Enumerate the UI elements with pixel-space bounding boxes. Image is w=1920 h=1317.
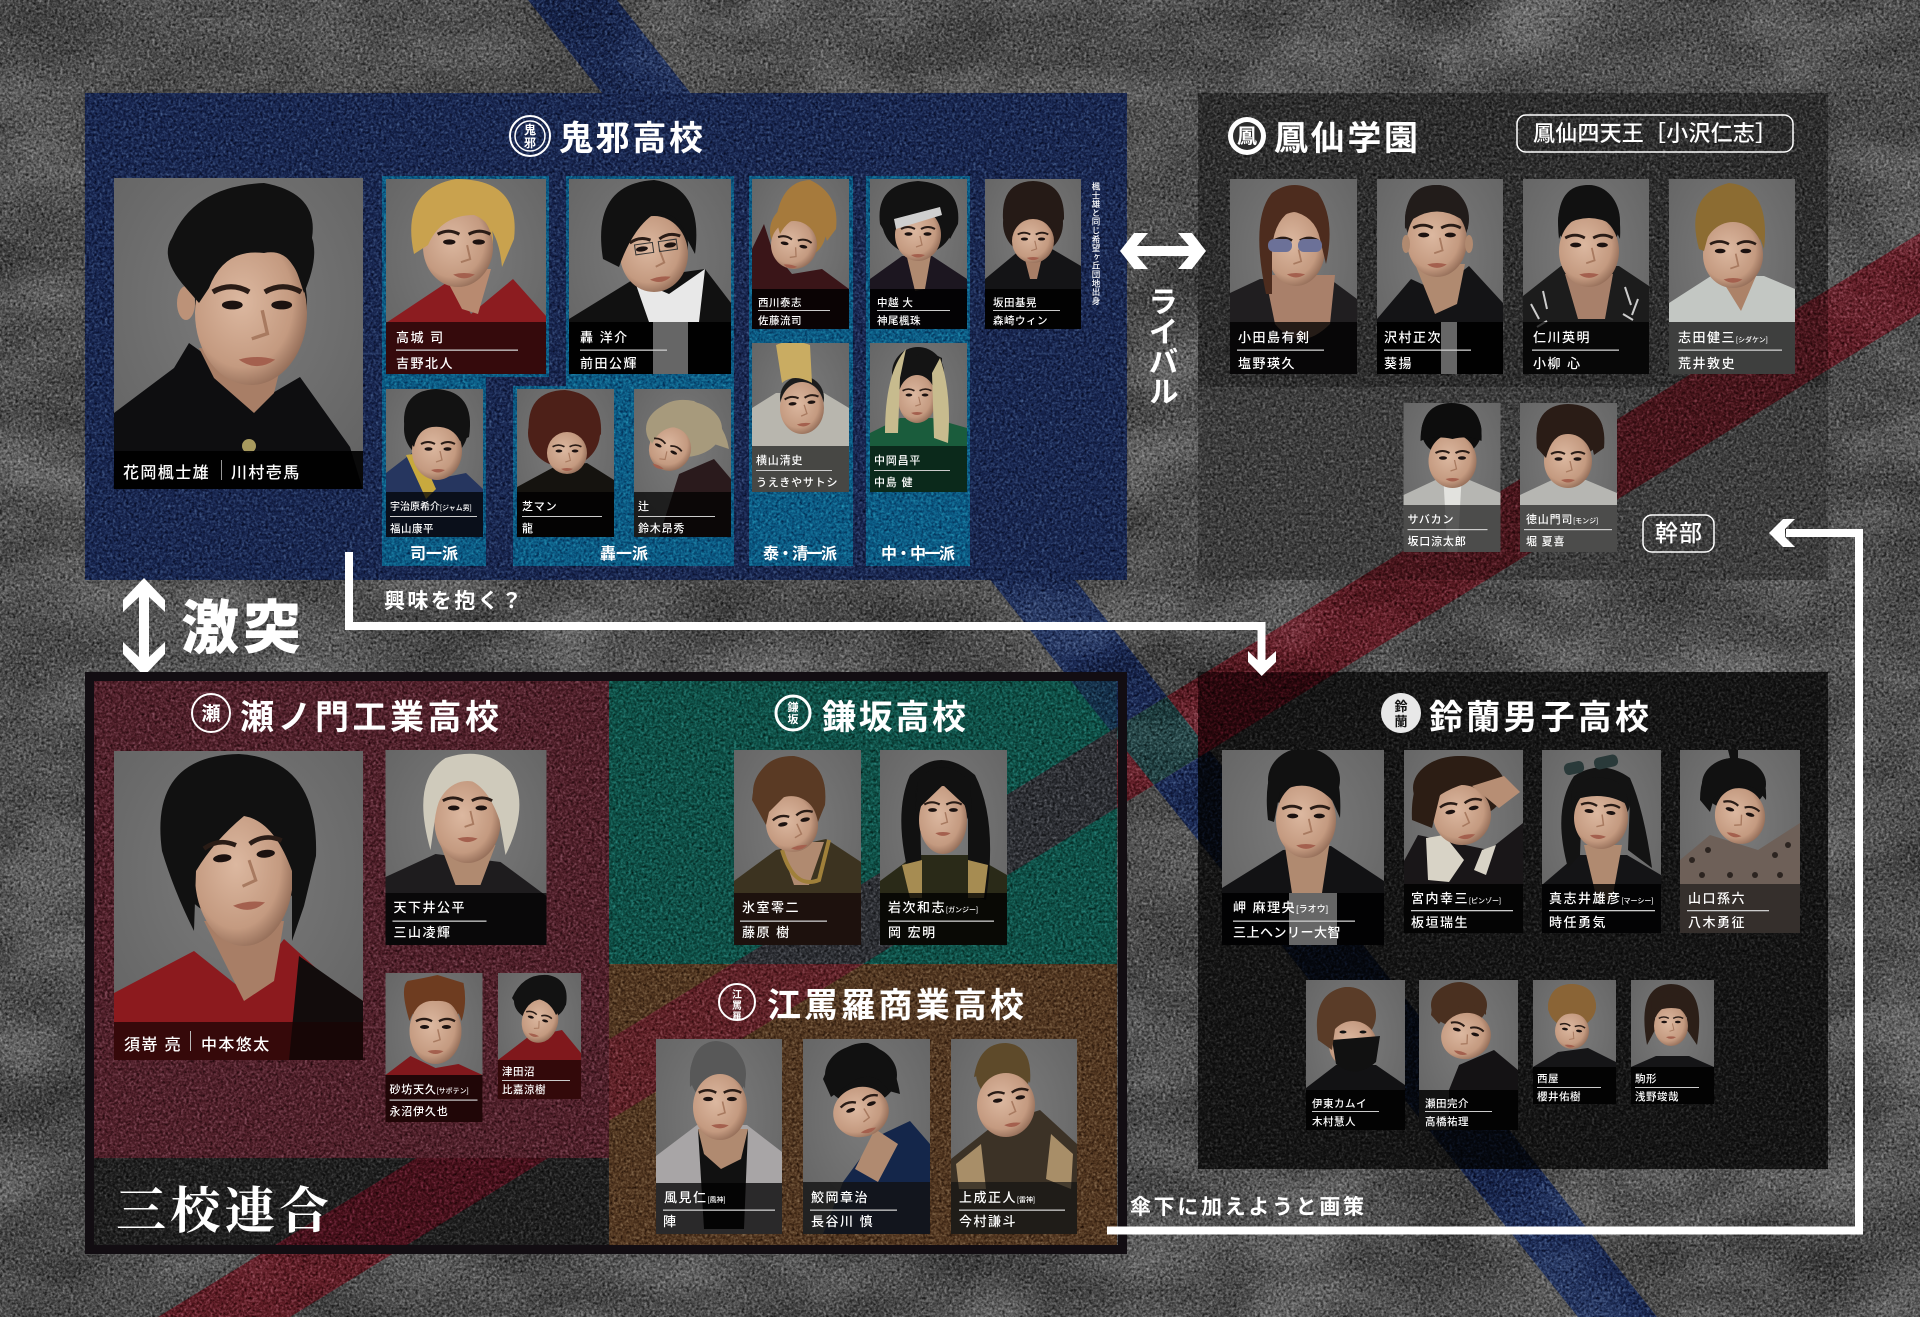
school title: 鬼邪高校: 鬼: [524, 122, 536, 137]
portrait: 風見仁: [656, 1039, 782, 1234]
portrait: 志田健三: 荒井敦史: [1678, 356, 1736, 371]
portrait: 伊東カムイ: 伊東カムイ: [1312, 1097, 1367, 1110]
portrait: 芝マン: 龍: [522, 521, 534, 535]
portrait: サバカン: サバカン: [1408, 513, 1454, 526]
school title: 鬼邪高校: 邪: [524, 136, 536, 150]
note: 希望ヶ丘団地出身: 楓士雄と同じ希望ヶ丘団地出身: [1091, 181, 1101, 305]
faction labels: 司一派: [410, 545, 458, 563]
portrait: 上成正人: 今村謙斗: [959, 1214, 1017, 1229]
connector: 興味を抱く？ arrow: 興味を抱く？: [384, 590, 522, 613]
portrait: 天下井公平: [386, 750, 546, 945]
portrait: 辻: [634, 389, 731, 537]
portrait: 鮫岡章治: 長谷川 慎: [811, 1214, 874, 1229]
portrait: 小田島有剣: 塩野瑛久: [1238, 356, 1296, 371]
portrait: 宇治原希介: 宇治原希介[ジャム男]: [390, 500, 472, 513]
portrait: 宇治原希介: [386, 389, 483, 537]
school title: 鬼邪高校: 鬼邪高校: [559, 120, 703, 158]
portrait: 上成正人: [951, 1039, 1077, 1234]
portrait: 宮内幸三: [1404, 750, 1523, 933]
portrait: 山口孫六: 八木勇征: [1688, 915, 1746, 930]
portrait: 真志井雄彦: [1542, 750, 1661, 933]
portrait: 仁川英明: 小柳 心: [1533, 356, 1582, 371]
portrait: 駒形: 浅野竣哉: [1635, 1090, 1679, 1103]
portrait: 轟 洋介: [569, 179, 731, 374]
portrait: 山口孫六: [1680, 750, 1800, 933]
portrait: 小田島有剣: [1230, 179, 1357, 374]
portrait: 岩次和志: [880, 750, 1007, 945]
portrait: 瀬田完介: [1419, 980, 1518, 1130]
portrait: 津田沼: [498, 973, 581, 1099]
panel: 鬼邪高校: [85, 93, 1127, 580]
school title: 瀬ノ門工業高校: 瀬ノ門工業高校: [240, 699, 499, 737]
portrait: 徳山門司: 徳山門司[モンジ]: [1526, 512, 1598, 526]
portrait: 瀬田完介: 瀬田完介: [1425, 1097, 1469, 1110]
portrait: 西屋: 西屋: [1537, 1073, 1559, 1085]
portrait: 天下井公平: 天下井公平: [394, 900, 466, 915]
portrait: 徳山門司: 堀 夏喜: [1526, 534, 1565, 548]
portrait: 中岡昌平: 中島 健: [874, 475, 913, 489]
portrait: 砂坊天久: 永沼伊久也: [390, 1104, 448, 1118]
portrait: 真志井雄彦: 時任勇気: [1549, 915, 1607, 930]
portrait: 横山清史: うえきやサトシ: [756, 476, 838, 489]
portrait: 坂田基晃: 森崎ウィン: [993, 314, 1048, 327]
panel: 三校連合 frame: [85, 672, 1127, 1254]
portrait: 上成正人: 上成正人[雷神]: [959, 1190, 1035, 1205]
portrait: 志田健三: [1669, 179, 1795, 374]
portrait: 瀬田完介: 高橋祐理: [1425, 1115, 1469, 1128]
portrait: 仁川英明: [1523, 179, 1649, 374]
portrait: 坂田基晃: [985, 179, 1081, 329]
school title: 鳳仙学園: 鳳仙学園: [1274, 120, 1418, 158]
portrait: 花岡楓士雄: 川村壱馬: [231, 464, 301, 482]
portrait: 津田沼: 津田沼: [502, 1065, 535, 1078]
faction labels: 轟一派: [600, 545, 648, 563]
portrait: 沢村正次: 葵揚: [1384, 356, 1413, 371]
connector: 興味を抱く？ arrow: [349, 552, 1276, 676]
school title: 江罵羅商業高校: 江: [732, 988, 742, 1001]
portrait: 砂坊天久: [386, 973, 482, 1122]
panel: 鳳仙学園: [1198, 93, 1828, 580]
arrow: clash double arrow: [123, 578, 165, 676]
portrait: 伊東カムイ: [1306, 980, 1405, 1130]
band: 三校連合: 三校連合: [116, 1183, 329, 1239]
band: 三校連合: [94, 1158, 609, 1245]
school title: 鈴蘭男子高校: 蘭: [1394, 714, 1408, 729]
portrait: 氷室零二: [734, 750, 861, 945]
portrait: 高城 司: [386, 179, 546, 374]
portrait: 西屋: 櫻井佑樹: [1537, 1090, 1581, 1103]
school title: 江罵羅商業高校: 羅: [732, 1011, 742, 1021]
portrait: 宮内幸三: 宮内幸三[ピンゾー]: [1411, 891, 1501, 906]
portrait: 駒形: [1631, 980, 1714, 1104]
portrait: 沢村正次: [1377, 179, 1503, 374]
school title: 鎌坂高校: 鎌: [788, 700, 798, 714]
portrait: 岬 麻理央: 三上ヘンリー大智: [1233, 925, 1341, 940]
portrait: 宇治原希介: 福山康平: [390, 522, 434, 535]
school title: 鳳仙学園: 鳳: [1237, 125, 1257, 148]
portrait: 氷室零二: 藤原 樹: [742, 925, 791, 940]
portrait: 横山清史: 横山清史: [756, 453, 803, 467]
portrait: 沢村正次: 沢村正次: [1384, 330, 1442, 345]
portrait: 風見仁: 陣: [663, 1214, 678, 1229]
label: ライバル: ライバル: [1144, 286, 1178, 406]
portrait: 中越 大: 中越 大: [877, 296, 913, 309]
portrait: 中岡昌平: [870, 343, 967, 492]
portrait: サバカン: 坂口涼太郎: [1408, 534, 1466, 548]
connector: 傘下に加えようと画策 arrow: [1107, 519, 1859, 1230]
portrait: 岩次和志: 岩次和志[ガンジー]: [888, 900, 978, 915]
badge: 幹部: 幹部: [1655, 520, 1702, 546]
school title: 瀬ノ門工業高校: 瀬: [201, 703, 221, 725]
portrait: 岬 麻理央: 岬 麻理央[ラオウ]: [1233, 900, 1328, 915]
portrait: 志田健三: 志田健三[シダケン]: [1678, 330, 1768, 345]
portrait: サバカン: [1404, 403, 1500, 552]
portrait: 山口孫六: 山口孫六: [1688, 891, 1746, 906]
faction labels: [410, 545, 955, 563]
portrait: 西屋: [1533, 980, 1616, 1104]
school title: 江罵羅商業高校: 罵: [732, 1000, 742, 1012]
badge: 鳳仙四天王: 鳳仙四天王［小沢仁志］: [1533, 121, 1777, 146]
portrait: 西川泰志: 佐藤流司: [758, 314, 802, 327]
portrait: 氷室零二: 氷室零二: [742, 900, 800, 915]
portrait: 徳山門司: [1520, 403, 1617, 552]
portrait: 天下井公平: 三山凌輝: [394, 925, 452, 940]
portrait: 坂田基晃: 坂田基晃: [993, 296, 1037, 309]
portrait: 西川泰志: [752, 179, 849, 329]
portrait: 宮内幸三: 板垣瑞生: [1411, 915, 1469, 930]
portrait: 西川泰志: 西川泰志: [758, 296, 802, 309]
connector: 傘下に加えようと画策 arrow: 傘下に加えようと画策: [1130, 1196, 1364, 1219]
portrait: 伊東カムイ: 木村慧人: [1312, 1115, 1356, 1128]
school title: 鎌坂高校: 鎌坂高校: [822, 699, 966, 737]
faction labels: 中・中一派: [881, 545, 955, 563]
portrait: 辻: 辻: [638, 499, 650, 513]
portrait: 横山清史: [752, 342, 849, 492]
school title: 鬼邪高校: [510, 116, 703, 158]
portrait: 高城 司: 吉野北人: [396, 356, 454, 371]
portrait: 須嵜 亮: 須嵜 亮: [124, 1036, 182, 1054]
school title: 江罵羅商業高校: 江罵羅商業高校: [767, 987, 1024, 1025]
portrait: 駒形: 駒形: [1635, 1072, 1657, 1085]
portrait: 岬 麻理央: [1222, 748, 1384, 945]
portrait: 辻: 鈴木昂秀: [638, 521, 685, 535]
portrait: 花岡楓士雄: 花岡楓士雄: [123, 464, 210, 482]
panel: 鈴蘭男子高校: [1198, 672, 1828, 1169]
portrait: 轟 洋介: 轟 洋介: [580, 330, 629, 345]
portrait: 須嵜 亮: [114, 751, 363, 1060]
faction labels: 泰・清一派: [763, 545, 837, 563]
portrait: 中越 大: [870, 179, 967, 329]
portrait: 中越 大: 神尾楓珠: [877, 314, 921, 327]
badge: 幹部: [1643, 515, 1714, 552]
portrait: 花岡楓士雄: [114, 178, 363, 490]
portrait: 真志井雄彦: 真志井雄彦[マーシー]: [1549, 891, 1653, 906]
portrait: 砂坊天久: 砂坊天久[サボテン]: [390, 1082, 469, 1096]
portrait: 鮫岡章治: 鮫岡章治: [811, 1190, 869, 1205]
label: 激突: 激突: [181, 596, 301, 661]
school title: 鈴蘭男子高校: 鈴: [1394, 699, 1408, 714]
portrait: 須嵜 亮: 中本悠太: [201, 1036, 271, 1054]
portrait: 小田島有剣: 小田島有剣: [1238, 330, 1311, 345]
portrait: 鮫岡章治: [803, 1039, 930, 1234]
portrait: 津田沼: 比嘉涼樹: [502, 1083, 546, 1096]
portrait: 仁川英明: 仁川英明: [1533, 330, 1591, 345]
portrait: 風見仁: 風見仁[風神]: [664, 1190, 725, 1205]
portrait: 中岡昌平: 中岡昌平: [874, 453, 921, 467]
panel: 江罵羅商業高校: [609, 964, 1117, 1245]
badge: 鳳仙四天王: [1517, 115, 1793, 152]
arrow: rival double arrow: [1120, 233, 1206, 269]
panel: 瀬ノ門工業高校: [94, 681, 609, 1158]
portrait: 岩次和志: 岡 宏明: [888, 925, 937, 940]
portrait: 芝マン: [517, 389, 614, 537]
portrait: 高城 司: 高城 司: [396, 330, 445, 345]
school title: 鈴蘭男子高校: 鈴蘭男子高校: [1429, 699, 1649, 737]
portrait: 芝マン: 芝マン: [522, 499, 557, 513]
school title: 鎌坂高校: 坂: [788, 713, 798, 726]
portrait: 轟 洋介: 前田公輝: [580, 356, 638, 371]
panel: 鎌坂高校: [609, 681, 1117, 964]
